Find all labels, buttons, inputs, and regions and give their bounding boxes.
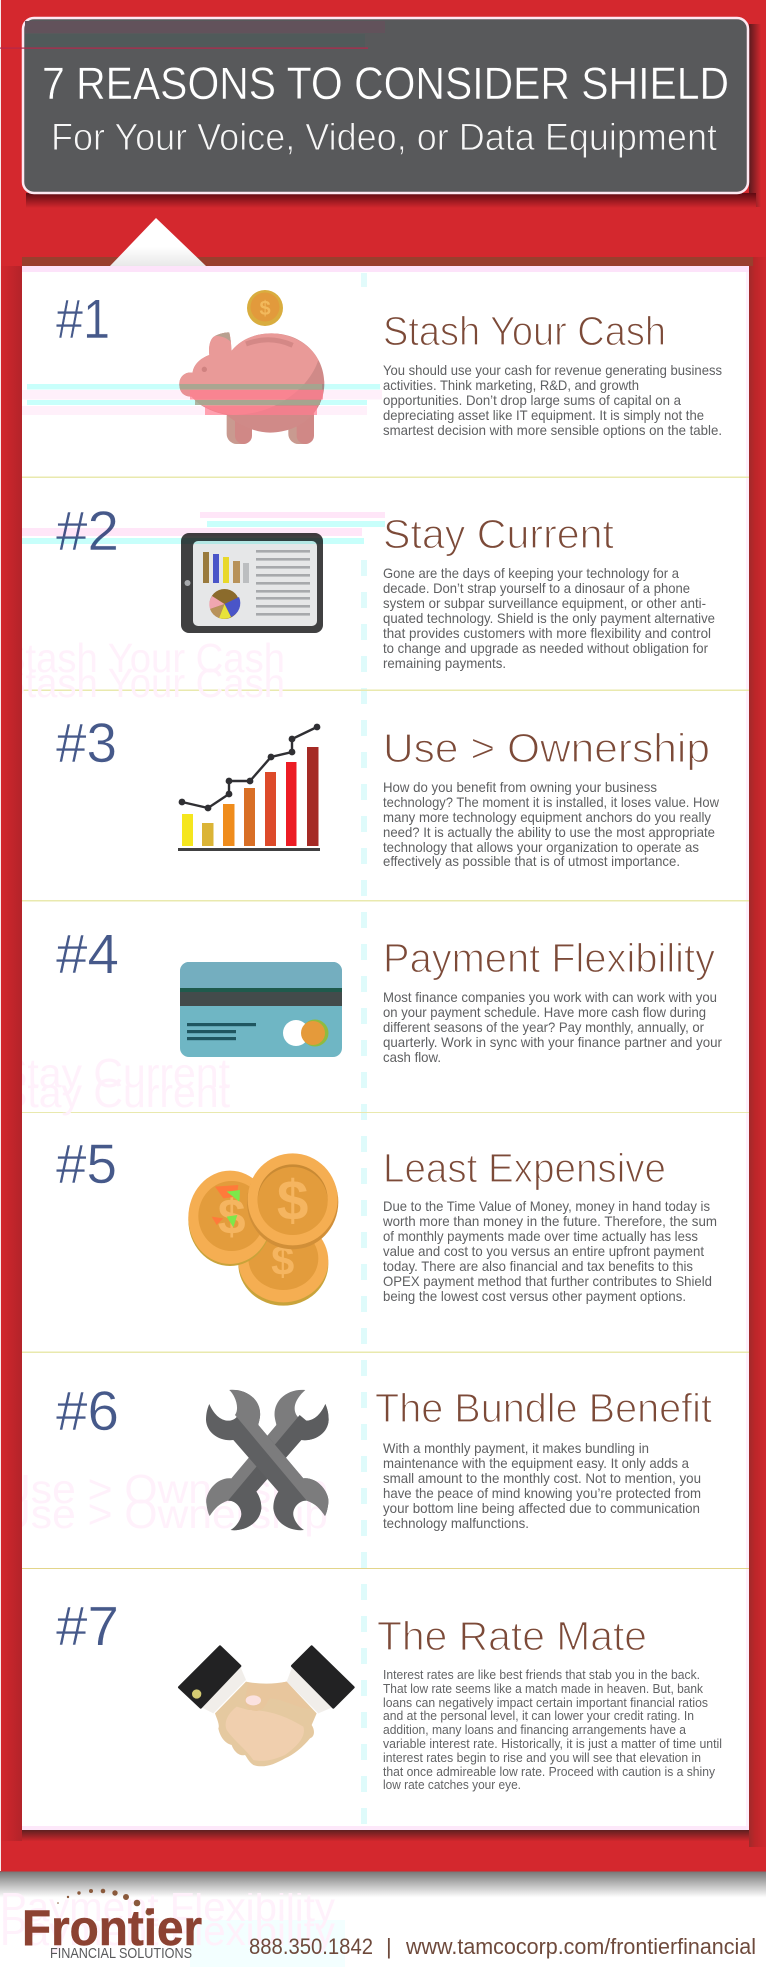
icon: gold coins: $	[218, 1189, 246, 1245]
icon: rising bar chart	[178, 724, 320, 851]
text 1: You should use your cash for revenue generating business	[383, 362, 722, 378]
text 7: Interest rates are like best friends that stab you in the back.	[383, 1667, 700, 1682]
text 6: technology malfunctions.	[383, 1515, 529, 1531]
number 4: #4	[56, 922, 119, 985]
white pointer arrow	[22, 218, 753, 266]
footer contact: 888.350.1842	[249, 1934, 373, 1959]
footer logo	[0, 1884, 345, 1967]
text 5: value and cost to you versus an entire upfront payment	[383, 1243, 704, 1259]
text 4: cash flow.	[383, 1049, 441, 1065]
heading 3: Use > Ownership	[383, 725, 710, 771]
text 3: effectively as possible that is of utmost importance.	[383, 853, 680, 869]
text 7: That low rate seems like a match made in heaven. But, bank	[383, 1681, 703, 1696]
icon: handshake	[179, 1647, 353, 1766]
text 2: quated technology. Shield is the only payment alternative	[383, 610, 715, 626]
icon: crossed wrenches	[206, 1390, 329, 1530]
text 1	[383, 362, 722, 438]
faded repeat text	[0, 635, 328, 1537]
dividers	[22, 476, 749, 1569]
colour streaks	[22, 384, 385, 544]
text 3: many more technology equipment anchors do you really	[383, 809, 711, 825]
text 7: addition, many loans and financing arrangements have a	[383, 1722, 687, 1737]
section 2	[56, 499, 715, 671]
text 6: have the peace of mind knowing you’re protected from	[383, 1485, 701, 1501]
text 2: to change and upgrade as needed without obligation for	[383, 640, 708, 656]
text 3	[383, 779, 720, 869]
text 5: OPEX payment method that further contributes to Shield	[383, 1273, 712, 1289]
number 5: #5	[56, 1132, 117, 1195]
text 3: technology that allows your organization to operate as	[383, 839, 699, 855]
number 6: #6	[56, 1379, 119, 1442]
text 3: need? It is actually the ability to use the most appropriate	[383, 824, 715, 840]
footer contact: |	[386, 1934, 392, 1959]
text 5: today. There are also financial and tax benefits to this	[383, 1258, 693, 1274]
icon: coin: $	[259, 298, 271, 320]
text 6: small amount to the monthly cost. Not to mention, you	[383, 1470, 701, 1486]
icon: gold coins: $	[271, 1237, 294, 1284]
text 1: activities. Think marketing, R&D, and growth	[383, 377, 639, 393]
text 7: low rate catches your eye.	[383, 1777, 521, 1792]
text 4: different seasons of the year? Pay monthly, annually, or	[383, 1019, 704, 1035]
text 5: of monthly payments made over time actually has less	[383, 1228, 698, 1244]
faded repeat text: Stash Your Cash	[0, 660, 285, 706]
text 2: Gone are the days of keeping your technology for a	[383, 565, 679, 581]
number 7: #7	[56, 1594, 119, 1657]
logo wordmark: Frontier	[22, 1900, 202, 1956]
section 7	[56, 1594, 722, 1792]
heading 6: The Bundle Benefit	[375, 1385, 713, 1431]
title banner	[0, 18, 761, 208]
heading 2: Stay Current	[383, 511, 615, 557]
faded repeat text: Stash Your Cash	[0, 635, 285, 681]
logo dots	[57, 1889, 153, 1916]
faded repeat text: Payment Flexibility	[0, 1908, 335, 1954]
text 4: Most finance companies you work with can work with you	[383, 989, 717, 1005]
text 7	[383, 1667, 722, 1792]
text 2	[383, 565, 715, 671]
faded repeat text: Stay Current	[0, 1070, 231, 1116]
faded repeat text	[3, 1893, 345, 1967]
text 5: Due to the Time Value of Money, money in hand today is	[383, 1198, 710, 1214]
text 5: being the lowest cost versus other payment options.	[383, 1288, 686, 1304]
heading 7: The Rate Mate	[377, 1613, 647, 1659]
text 6: maintenance with the equipment easy. It only adds a	[383, 1455, 689, 1471]
icon: gold coins: $	[277, 1170, 308, 1233]
footer contact	[249, 1934, 756, 1959]
heading 5: Least Expensive	[383, 1145, 666, 1191]
icon: piggy bank	[179, 332, 324, 444]
text 1: smartest decision with more sensible options on the table.	[383, 422, 722, 438]
faded repeat text: Stay Current	[0, 1050, 231, 1096]
section 3	[56, 711, 720, 869]
text 6: your bottom line being affected due to communication	[383, 1500, 700, 1516]
section 5	[56, 1132, 717, 1306]
text 1: opportunities. Don’t drop large sums of capital on a	[383, 392, 681, 408]
text 7: variable interest rate. Historically, it is just a matter of time until	[383, 1736, 722, 1751]
text 5: worth more than money in the future. Therefore, the sum	[382, 1213, 717, 1229]
number 1: #1	[56, 287, 110, 350]
text 1: depreciating asset like IT equipment. It is simply not the	[383, 407, 704, 423]
number 3: #3	[56, 711, 117, 774]
text 4: on your payment schedule. Have more cash flow during	[383, 1004, 706, 1020]
heading 4: Payment Flexibility	[383, 935, 715, 981]
text 3: How do you benefit from owning your business	[383, 779, 657, 795]
icon: credit card	[180, 962, 342, 1057]
text 2: remaining payments.	[383, 655, 506, 671]
number 2: #2	[56, 499, 119, 562]
text 7: interest rates begin to rise and you will see that elevation in	[383, 1750, 701, 1765]
text 6	[383, 1440, 701, 1531]
icon: tablet	[181, 533, 323, 633]
heading 1: Stash Your Cash	[383, 308, 666, 354]
text 2: that provides customers with more flexibility and control	[383, 625, 711, 641]
faded repeat text: Payment Flexibility	[0, 1884, 335, 1930]
text 6: With a monthly payment, it makes bundling in	[383, 1440, 649, 1456]
faded repeat text: Use > Ownership	[0, 1491, 328, 1537]
text 4	[383, 989, 722, 1065]
section 6	[56, 1379, 713, 1531]
footer contact: www.tamcocorp.com/frontierfinancial	[405, 1934, 756, 1959]
text 3: technology? The moment it is installed, it loses value. How	[383, 794, 720, 810]
icon: gold coins	[188, 1153, 338, 1306]
icon: coin	[247, 290, 283, 326]
logo tagline: FINANCIAL SOLUTIONS	[50, 1945, 192, 1962]
text 2: decade. Don’t strap yourself to a dinosaur of a phone	[383, 580, 690, 596]
text 7: loans can negatively impact certain important financial ratios	[383, 1695, 708, 1710]
white panel	[22, 266, 749, 1841]
faded repeat text: Use > Ownership	[0, 1466, 328, 1512]
text 4: quarterly. Work in sync with your finance partner and your	[383, 1034, 722, 1050]
section 1	[56, 287, 722, 444]
text 7: and at the personal level, it can lower your credit rating. In	[383, 1708, 694, 1723]
text 2: system or subpar surveillance equipment, or other anti-	[383, 595, 706, 611]
section 4	[56, 922, 722, 1065]
subtitle: For Your Voice, Video, or Data Equipment	[51, 117, 717, 159]
text 7: that once admireable low rate. Proceed with caution is a shiny	[383, 1764, 715, 1779]
text 5	[382, 1198, 717, 1304]
